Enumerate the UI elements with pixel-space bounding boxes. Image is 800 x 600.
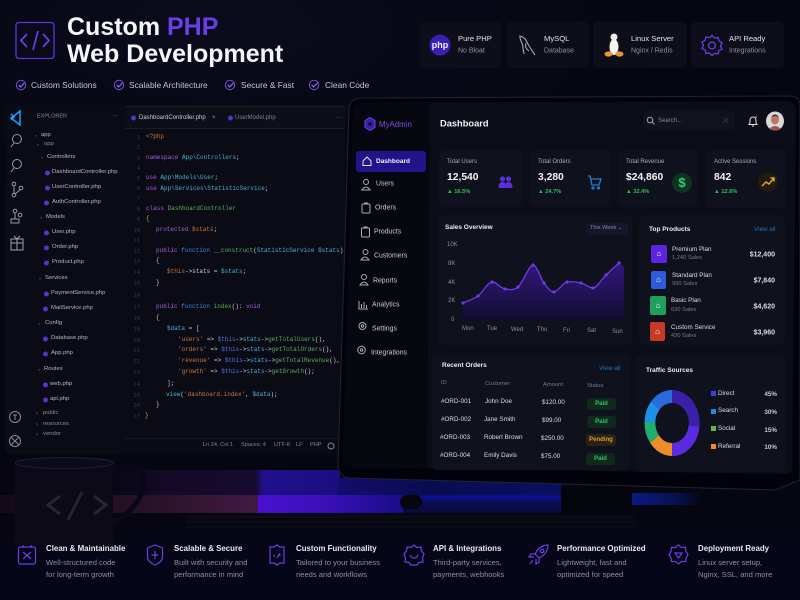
row: Premium Plan: ⌂ [657,249,661,258]
checklist: key benefits [16,80,369,90]
panel: code editor window: public function __construct(StatisticService $stats) [156,247,343,254]
panel: code editor window: 21 [133,346,140,353]
panel: Recent Orders: Emily Davis [484,452,517,459]
brand: MyAdmin [364,117,412,131]
tech chip: API Ready: API Ready [729,34,765,43]
feature: Deployment Ready: Deployment Ready [698,544,769,553]
panel: code editor window: ⌄ [38,276,42,282]
icon: shield hexagon [364,117,376,131]
feature: API & Integrations: payments, webhooks [433,570,504,579]
row: ORD-004: #ORD-004 [440,451,470,458]
logo: code brackets icon [15,22,55,60]
label: Scalable Architecture: Scalable Architecture [129,80,208,90]
feature: Deployment Ready: Linux server setup, [698,558,762,567]
panel: code editor window: 'growth' => $this->stats->getGrowth(); [178,368,315,375]
panel: code editor window: ⌄ [34,132,38,138]
panel: Recent Orders: John Doe [485,398,512,405]
item: Customers: Customers [374,253,407,260]
legend: Direct: 45% [764,390,777,397]
panel: code editor window: Product.php [52,259,84,265]
feature: Clean & Maintainable: Clean & Maintainable [46,544,125,553]
panel: code editor window: PHP [310,442,322,448]
chart panel: Sales Overview: Sales Overview [445,224,493,231]
panel: code editor window: 22 [133,357,140,364]
row: Basic Plan: $4,620 [754,304,775,310]
stat card: Total Users [439,150,523,207]
stat card: Total Revenue: ▲ 32.4% [626,189,649,195]
chart panel: Sales Overview [438,215,632,345]
feature: Custom Functionality: needs and workflows [296,570,367,579]
panel: code editor window: MailService.php [51,305,93,311]
stat card: Total Orders: ▲ 24.7% [538,189,561,195]
stat card: Total Revenue [618,150,698,207]
panel: code editor window: 13 [133,257,140,264]
row: Standard Plan: 990 Sales [672,281,697,287]
code listing [133,130,345,422]
feature: Deployment Ready: Nginx, SSL, and more [698,570,772,579]
dropdown: This Week: This Week ⌄ [590,225,623,231]
tech chip: Linux Server: Linux Server [631,34,674,43]
row: Premium Plan: 1,240 Sales [672,255,702,261]
feature: Performance Optimized: Lightweight, fast and [557,558,627,567]
panel: Recent Orders: Customer [485,381,510,387]
check: Custom Solutions [16,80,26,90]
stat card: Total Revenue: $24,860 [626,172,663,183]
stat card: Total Users: ▲ 16.5% [447,189,470,195]
feature: Custom Functionality: Custom Functionality [296,544,377,553]
panel: code editor window: ]; [167,380,174,387]
panel: code editor window: 5 [137,174,140,181]
tech chip: API Ready: Integrations [729,48,766,54]
chart panel: Sales Overview: 0 [451,317,454,323]
panel: code editor window: { [156,314,160,321]
panel: code editor window: 15 [133,279,140,286]
panel: code editor window: protected $stats; [156,226,217,233]
panel: code editor window: web.php [50,381,72,387]
panel: code editor window: use App\Services\StatisticService; [146,184,268,192]
panel: code editor window: ⌄ [40,154,44,160]
panel: code editor window: 20 [133,336,140,343]
feature: Custom Functionality [269,544,380,579]
icon: clean code [18,545,36,565]
row: ORD-001: #ORD-001 [441,397,471,404]
panel: code editor window: User.php [52,229,76,235]
feature: Deployment Ready [668,544,783,582]
title: Web Development [67,40,283,68]
row: Basic Plan [650,296,775,315]
panel: code editor window: 11 [133,236,140,243]
table header: ID [441,380,447,386]
check: Secure & Fast [224,80,236,90]
panel: Top Products: View all [754,226,776,233]
panel: code editor window: LF [296,442,303,448]
feature: API & Integrations [403,544,504,579]
panel: code editor window: AuthController.php [52,199,101,205]
row: ORD-002: #ORD-002 [441,415,471,422]
panel: code editor window: UTF-8 [274,442,290,448]
legend: Search: 30% [764,408,777,415]
heading: Dashboard: Dashboard [440,118,489,128]
feature: Clean & Maintainable: Well-structured code [46,558,116,567]
panel: code editor window: } [156,401,160,408]
stat card: Total Users: Total Users [447,159,477,165]
panel: code editor window: 2 [137,143,140,150]
panel: code editor window: 4 [137,164,140,171]
panel: Recent Orders: $99.00 [542,417,561,424]
row: Basic Plan: Basic Plan [671,297,701,304]
search box: ⤫ [723,117,729,124]
panel: code editor window: 7 [137,194,140,201]
panel: Traffic Sources: Traffic Sources [646,367,693,374]
chart panel: Sales Overview: 4K [448,280,455,286]
panel: code editor window: › [36,422,38,428]
search box [643,111,735,130]
panel: dashboard monitor [338,96,800,490]
panel: code editor window: App.php [51,350,73,356]
panel: code editor window: Models [46,214,65,220]
icon: rocket [528,544,549,566]
panel: code editor window: DashboardController.php [52,169,118,175]
feature: Performance Optimized [528,544,648,582]
label: Clean Code: Clean Code [325,80,369,90]
legend: Referral: 10% [764,444,777,451]
feature: Scalable & Secure [146,544,247,579]
item: Settings: Settings [372,326,397,333]
panel: Recent Orders: $250.00 [541,435,564,442]
icon: shield [146,544,164,566]
panel: code editor window: 3 [137,154,140,161]
row: Custom Service: Custom Service [671,324,715,331]
panel: code editor window: Services [45,275,68,281]
panel: code editor window: PaymentService.php [51,290,105,296]
panel: code editor window: 16 [133,291,140,298]
legend: Social [711,424,777,433]
feature: Scalable & Secure: Built with security and [174,558,247,567]
icon: code gear [269,544,285,566]
tech chip: MySQL: MySQL [544,34,569,43]
stat card: Total Orders: 3,280 [538,172,564,183]
row: Basic Plan: 630 Sales [671,307,696,313]
panel: code editor window: Routes [44,366,63,372]
panel: Recent Orders: $75.00 [541,453,560,460]
row: Premium Plan: $12,400 [750,252,775,258]
legend: Referral: Referral [718,442,740,449]
row: Standard Plan: $7,840 [754,278,775,284]
item: Users: Users [376,181,394,188]
panel: code editor window: { [156,257,160,264]
chart panel: Sales Overview: Tue [487,326,497,332]
tech chip: Pure PHP: Pure PHP [458,34,492,43]
panel: Recent Orders: View all [599,365,621,372]
chart panel: Sales Overview: Sat [587,328,596,334]
search box: Search... [658,118,682,124]
panel: Recent Orders: Pending [589,437,613,443]
chart panel: Sales Overview: Fri [563,328,570,334]
legend: Direct: Direct [718,389,734,396]
label: Custom Solutions: Custom Solutions [31,80,97,90]
panel: code editor window: 'orders' => $this->stats->getTotalOrders(), [178,346,333,353]
panel: code editor window: public [43,410,58,416]
panel: code editor window: 1 [137,133,140,140]
stat card: Total Orders [530,150,611,207]
icon: bell [748,116,758,126]
panel: code editor window: Database.php [51,335,88,341]
feature: Performance Optimized: Performance Optimized [557,544,646,553]
panel: code editor window: 14 [133,268,140,275]
stat card: Total Revenue: $ [678,175,686,190]
panel: code editor window: 27 [133,412,140,419]
stat card: Active Sessions: 842 [714,172,731,183]
mug with code symbol [14,457,144,524]
tech chip: Linux Server [593,22,687,68]
panel: code editor window: ··· [112,113,118,119]
stat card: Active Sessions [706,150,786,208]
legend: Social: Social [718,424,735,431]
panel: code editor window: 8 [137,205,140,212]
brand: MyAdmin: MyAdmin [379,120,412,129]
active item: Dashboard: Dashboard [376,157,410,164]
feature: Scalable & Secure: Scalable & Secure [174,544,242,553]
panel: Recent Orders: Jane Smith [484,416,516,423]
sidebar navigation [356,151,426,357]
legend: Social: 15% [764,426,777,433]
panel: code editor window: view('dashboard.index', $data); [166,391,278,398]
item: Reports: Reports [373,278,397,285]
panel: code editor window: vendor [43,431,61,437]
panel: code editor window: EXPLORER [37,113,67,119]
panel: code editor window: ⌄ [37,366,41,372]
tech chip: Pure PHP: No Bloat [458,48,485,54]
row: Custom Service: ⌂ [655,327,660,336]
legend: Referral [711,442,777,451]
panel: code editor window: › [36,432,38,438]
panel: Recent Orders: Amount [543,382,563,388]
area line chart [461,261,624,320]
row: Basic Plan: ⌂ [656,301,660,310]
panel: code editor window: { [146,215,150,222]
item: Orders: Orders [375,205,396,212]
panel: Top Products: Top Products [649,226,690,233]
icon: deploy gear [668,544,689,566]
chart panel: Sales Overview: Sun [612,329,623,335]
panel: code editor window [9,106,345,450]
panel: code editor window: } [156,279,160,286]
panel: code editor window: } [145,412,149,419]
panel: code editor window: 19 [133,325,140,332]
panel: code editor window: ⌄ [39,214,43,220]
panel: code editor window: $data = [ [167,325,199,332]
row: Custom Service [650,322,775,341]
feature: Clean & Maintainable: for long-term growth [46,570,114,579]
panel: code editor window: class DashboardController [146,205,236,212]
panel: code editor window: use App\Models\User; [146,174,218,181]
item: Analytics: Analytics [372,302,400,309]
legend: Search [711,407,777,415]
panel: code editor window: 'revenue' => $this->stats->getTotalRevenue(), [178,357,340,364]
panel: Recent Orders: Status [587,383,603,389]
stat card: Total Revenue: Total Revenue [626,159,664,165]
check: Clean Code [308,80,320,90]
chart panel: Sales Overview: 2K [448,298,455,304]
panel: Recent Orders [432,355,630,470]
row: Custom Service: $3,960 [754,330,775,336]
feature: Scalable & Secure: performance in mind [174,570,243,579]
panel: code editor window: ⌄ [36,142,40,148]
feature: Clean & Maintainable [18,544,126,579]
panel: code editor window: UserModel.php [235,115,276,121]
panel: code editor window: DashboardController.php [139,115,206,121]
panel: code editor window: UserController.php [52,184,101,190]
item: Integrations: Integrations [371,350,407,357]
panel: Traffic Sources [636,355,785,472]
icon: gear [701,34,723,56]
row: Standard Plan [651,271,775,289]
active item: Dashboard [356,151,426,172]
tech chip: Linux Server: Nginx / Redis [631,48,673,54]
title: Custom PHP [67,13,218,41]
donut chart [644,390,700,456]
panel: code editor window: Config [45,320,62,326]
panel: code editor window: opp [44,141,54,147]
panel: code editor window: public function index(): void [156,303,260,310]
panel: Recent Orders: Paid [595,419,608,425]
row: Premium Plan: Premium Plan [672,246,712,253]
feature: Custom Functionality: Tailored to your business [296,558,380,567]
stat card: Active Sessions: Active Sessions [714,159,756,165]
panel: code editor window: 10 [133,226,140,233]
nav icons [357,179,371,354]
panel: Top Products [639,215,785,345]
panel: code editor window: 6 [137,184,140,191]
legend: Search: Search [718,407,738,414]
row: ORD-003: #ORD-003 [440,433,470,440]
icon: penguin [604,34,624,57]
x axis labels: Mon [462,326,474,332]
chart panel: Sales Overview: Wed [511,327,523,333]
tech chip: MySQL [506,22,589,68]
title [67,13,283,68]
panel: code editor window: 12 [133,247,140,254]
panel: Recent Orders: Paid [595,401,608,407]
explorer tree [27,110,125,445]
row: Standard Plan: ⌂ [656,275,661,284]
panel: code editor window: 17 [133,303,140,310]
chart panel: Sales Overview: 8K [448,261,455,267]
feature: API & Integrations: Third-party services, [433,558,502,567]
tech chip: Pure PHP [420,22,502,68]
panel: code editor window: 9 [137,215,140,222]
row: Standard Plan: Standard Plan [672,272,712,279]
panel: code editor window: 18 [133,314,140,321]
check: Scalable Architecture [114,80,124,90]
panel: code editor window: Ln 24, Col 1 [203,442,233,448]
row: Premium Plan [651,245,775,263]
panel: code editor window: $this->stats = $stats; [167,268,246,275]
icon: dolphin [519,36,536,56]
panel: code editor window: app [41,132,51,138]
panel: code editor window: api.php [50,396,69,402]
panel: code editor window: × [212,115,216,121]
panel: Recent Orders: Recent Orders [442,362,487,369]
monitor frame [338,96,800,490]
chart panel: Sales Overview: Thu [537,327,547,333]
item: Products: Products [374,229,401,236]
tech chip: API Ready [691,22,784,68]
panel: code editor window: Controllers [47,154,75,160]
panel: code editor window: ··· [336,115,342,121]
panel: code editor window: 24 [133,380,140,387]
panel: code editor window: 26 [133,401,140,408]
panel: code editor window: namespace App\Controllers; [146,154,240,161]
tech chip: MySQL: Database [544,48,574,54]
panel: Recent Orders: $120.00 [542,399,565,406]
panel: Recent Orders: Paid [594,456,607,462]
legend: Direct [711,389,777,397]
dropdown: This Week [586,223,628,235]
editor tabs [125,107,345,129]
icon: php [430,34,450,56]
panel: code editor window: 'users' => $this->stats->getTotalUsers(), [178,336,326,343]
panel: code editor window: 25 [133,391,140,398]
panel: code editor window: Order.php [52,244,78,250]
panel: code editor window: ⌄ [37,320,41,326]
panel: code editor window: resources [43,421,69,427]
stat card: Total Orders: Total Orders [538,159,571,165]
row: Custom Service: 430 Sales [671,333,696,339]
stat card: Total Users: 12,540 [447,172,478,183]
panel: code editor window: Spaces: 4 [241,442,266,448]
feature: Performance Optimized: optimized for speed [557,570,623,579]
status bar [125,438,345,455]
icon: api cloud [403,544,425,566]
label: Secure & Fast: Secure & Fast [241,80,294,90]
activity bar icons [9,110,24,447]
icon: php: php [432,40,449,50]
panel: code editor window: 23 [133,368,140,375]
avatar [766,112,784,130]
y axis labels: 10K [447,242,458,248]
panel: code editor window: › [36,411,38,417]
feature: API & Integrations: API & Integrations [433,544,501,553]
stat card: Active Sessions: ▲ 12.6% [714,189,737,195]
panel: Recent Orders: Robert Brown [484,434,522,441]
panel: code editor window: <?php [146,133,164,140]
